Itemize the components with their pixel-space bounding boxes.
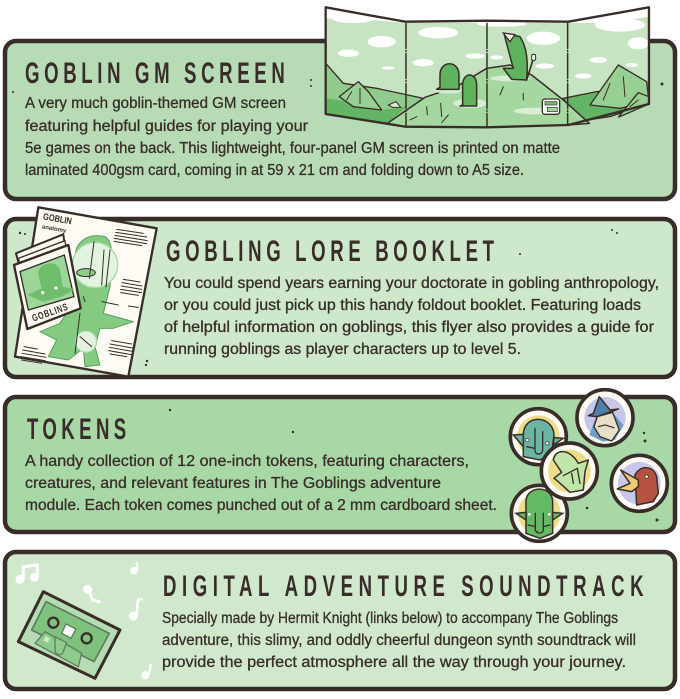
- panel: Tokens: [5, 397, 675, 532]
- goblin figures: [437, 33, 527, 106]
- token: pale goblin, centre: [541, 443, 597, 499]
- clouds: [326, 7, 649, 79]
- panel: Digital Adventure Soundtrack: [5, 552, 675, 689]
- heading: Tokens: TOKENS: [27, 413, 126, 446]
- screen outline: [326, 7, 649, 127]
- token: teal goblin: [510, 409, 566, 465]
- text block: booklet description: of helpful information on goblings, this flyer also provides a guide for: [164, 319, 654, 336]
- text block: GM screen description: laminated 400gsm card, coming in at 59 x 21 cm and folding down to A5 size.: [25, 162, 524, 179]
- text block: soundtrack description: [162, 610, 636, 671]
- panel: Goblin GM Screen: [5, 41, 675, 199]
- illustration: music notes: [16, 563, 151, 679]
- text block: booklet description: You could spend years earning your doctorate in gobling anthropology,: [164, 275, 659, 292]
- text block: soundtrack description: provide the perfect atmosphere all the way through your journey.: [162, 654, 626, 671]
- text block: booklet description: running goblings as player characters up to level 5.: [164, 341, 521, 358]
- text block: tokens description: A handy collection of 12 one-inch tokens, featuring characters,: [25, 453, 469, 470]
- mountains: [339, 82, 382, 110]
- text block: GM screen description: [25, 95, 560, 179]
- text block: tokens description: [25, 453, 497, 514]
- fold lines: [406, 23, 568, 127]
- small booklet: GOBLINS: [30, 301, 70, 324]
- text block: booklet description: or you could just pick up this handy foldout booklet. Featuring loads: [164, 297, 641, 314]
- specks: [19, 229, 618, 366]
- back hills: [326, 63, 423, 123]
- text block: soundtrack description: Specially made by Hermit Knight (links below) to accompany The Goblings: [162, 610, 618, 627]
- token: red bird: [611, 455, 667, 511]
- panel: Gobling Lore Booklet: [5, 219, 675, 377]
- central hill: [387, 65, 589, 127]
- text block: soundtrack description: adventure, this slimy, and oddly cheerful dungeon synth soundtrack will: [162, 632, 636, 649]
- text block: tokens description: creatures, and relevant features in The Goblings adventure: [25, 475, 441, 492]
- flyer text lines: [21, 229, 147, 363]
- token: wizard: [577, 390, 633, 446]
- flyer title: anatomy: [41, 224, 67, 235]
- hill ticks: [347, 77, 638, 123]
- illustration: cassette tape: [18, 592, 120, 678]
- token: green goblin, bottom left: [511, 485, 567, 541]
- illustration: tokens: [510, 390, 667, 541]
- specks: [12, 79, 664, 93]
- small booklet: [14, 234, 81, 329]
- text block: tokens description: module. Each token comes punched out of a 2 mm cardboard sheet.: [25, 497, 497, 514]
- flyer title: GOBLIN: [42, 211, 73, 227]
- heading: Digital Adventure Soundtrack: DIGITAL ADVENTURE SOUNDTRACK: [163, 570, 643, 603]
- specks: [169, 409, 659, 522]
- goblin body diagram: [40, 236, 133, 367]
- text block: GM screen description: 5e games on the back. This lightweight, four-panel GM screen is printed on matte: [25, 140, 560, 157]
- illustration: four-panel GM screen: [326, 7, 649, 127]
- heading: Goblin GM Screen: GOBLIN GM SCREEN: [25, 57, 285, 90]
- flyer title: [41, 211, 73, 235]
- heading: Gobling Lore Booklet: GOBLING LORE BOOKLET: [166, 235, 494, 268]
- illustration: goblin anatomy flyer and booklet: [14, 207, 157, 377]
- text block: GM screen description: featuring helpful guides for playing your: [25, 118, 308, 135]
- text block: GM screen description: A very much goblin-themed GM screen: [25, 95, 286, 112]
- text block: booklet description: [164, 275, 659, 358]
- treasure chest: [542, 99, 560, 114]
